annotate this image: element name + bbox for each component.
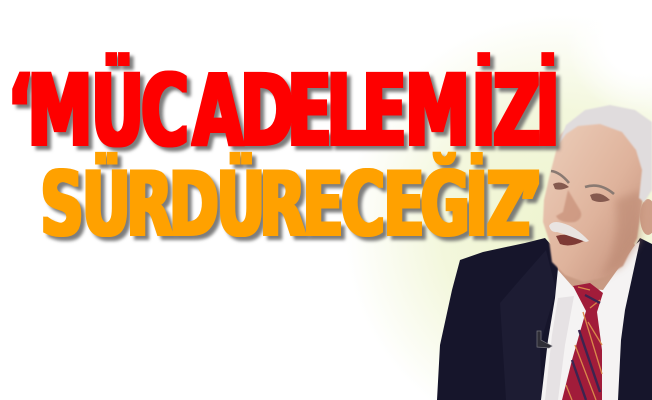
- shirt: [541, 241, 640, 400]
- headline line 1: ‘MÜCADELEMİZİ: [8, 53, 560, 169]
- eyebrows: [551, 171, 614, 194]
- ear: [640, 199, 652, 235]
- headline line 2: SÜRDÜRECEĞİZ’: [41, 153, 543, 256]
- shirt shading: [545, 296, 574, 400]
- neck: [556, 230, 635, 290]
- tie: [562, 283, 603, 400]
- hair: [558, 105, 652, 202]
- nose: [556, 190, 581, 222]
- jacket lapel: [500, 250, 556, 400]
- face: [543, 118, 645, 282]
- face shading: [600, 190, 642, 278]
- jacket: [437, 238, 652, 400]
- eyes: [553, 183, 610, 202]
- mouth: [556, 235, 584, 245]
- background glow: [330, 0, 652, 400]
- lapel microphone: [537, 331, 552, 348]
- moustache: [549, 222, 589, 242]
- portrait: man in suit: [437, 105, 652, 400]
